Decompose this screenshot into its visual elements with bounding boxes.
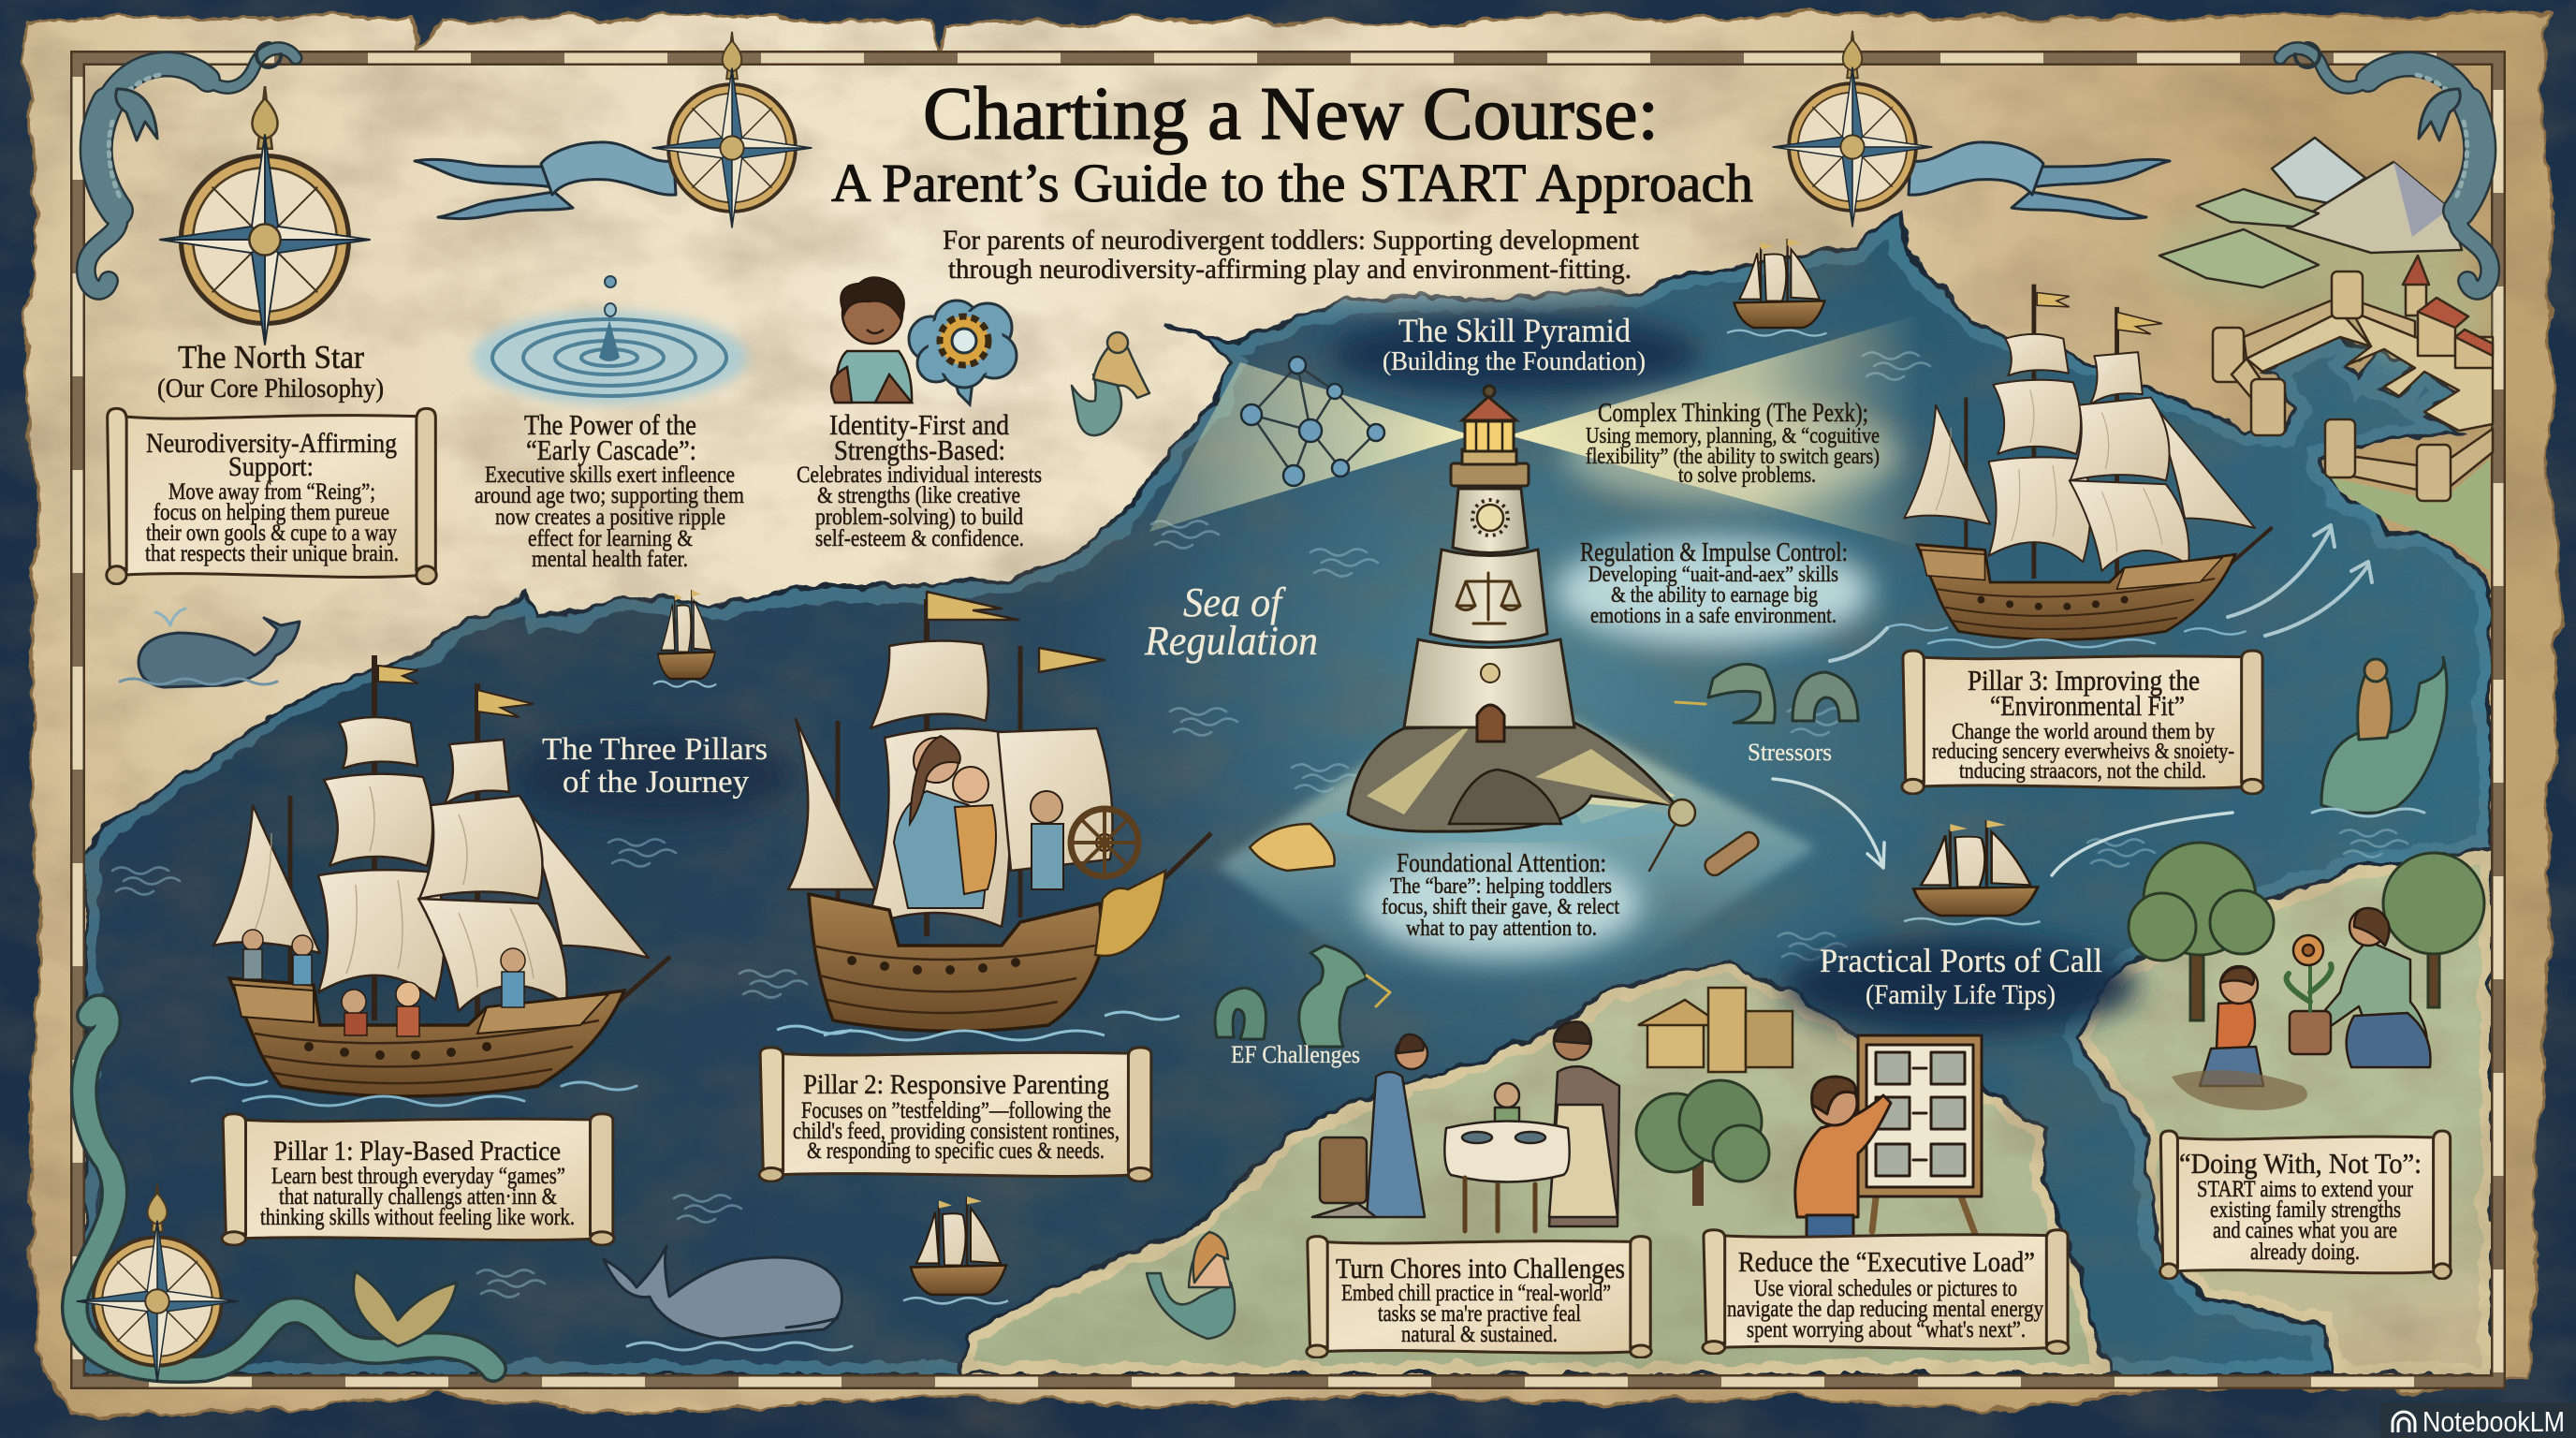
heading: the skill pyramid: (Building the Foundation): [1383, 346, 1646, 376]
heading: the three pillars of the journey: [542, 732, 768, 800]
heading: the north star: The North Star: [178, 339, 364, 375]
scroll: doing with, not to: START aims to extend your: [2197, 1177, 2414, 1202]
family at the table: [1312, 1021, 1619, 1231]
icon: brain and gear: [909, 301, 1017, 404]
scroll: reduce the executive load: Reduce the “Executive Load”: [1738, 1245, 2035, 1278]
scroll: reduce the executive load: navigate the dap reducing mental energy: [1727, 1297, 2043, 1322]
heading: the skill pyramid: The Skill Pyramid: [1398, 312, 1631, 349]
small ship, upper coast: [653, 590, 716, 687]
scroll: reduce the executive load: spent worrying about “what's next”.: [1747, 1317, 2026, 1343]
sea dragon: stressors: [1676, 664, 1858, 723]
lost items: map bag, key and log: [1250, 800, 1762, 879]
light beam wedges from the lighthouse: [1149, 315, 1919, 983]
sun emblem: [1472, 500, 1508, 536]
heading: practical ports of call: (Family Life Tips): [1866, 979, 2056, 1010]
whale, bottom: [604, 1246, 852, 1350]
foundational attention text: [1382, 849, 1619, 941]
rock island: [1315, 721, 1680, 843]
foundational attention text: focus, shift their gave, & relect: [1382, 895, 1619, 919]
text: the power of the early cascade: Executive skills exert infleence: [485, 462, 735, 488]
text: complex thinking: Complex Thinking (The Pexk);: [1598, 399, 1868, 428]
text: the power of the early cascade: now creates a positive ripple: [495, 505, 725, 530]
foundational attention text: what to pay attention to.: [1406, 917, 1597, 941]
compass: bottom left: [77, 1184, 238, 1382]
ship: pillar 1: [192, 655, 670, 1106]
scroll: pillar 3 environmental fit: Pillar 3: Improving the: [1968, 664, 2200, 697]
scroll: reduce the executive load: Use vioral schedules or pictures to: [1754, 1276, 2017, 1301]
text: complex thinking: to solve problems.: [1678, 463, 1816, 488]
scroll: pillar 3 environmental fit: reducing sencery everwheivs & snoiety-: [1932, 740, 2234, 764]
heading: practical ports of call: [1820, 942, 2102, 1010]
mountains and green hills, top right: [2153, 138, 2490, 356]
text: the power of the early cascade: effect for learning &: [528, 526, 693, 551]
scroll: turn chores into challenges: [1307, 1237, 1651, 1357]
heading: the north star: (Our Core Philosophy): [157, 374, 384, 404]
scroll: turn chores into challenges: natural & sustained.: [1401, 1322, 1558, 1347]
text: identity-first and strengths-based: self-esteem & confidence.: [815, 526, 1024, 551]
curved arrows toward the harbour: [1830, 525, 2372, 661]
heading: the skill pyramid: [1383, 312, 1646, 376]
scroll: pillar 1 play-based practice: thinking skills without feeling like work.: [260, 1205, 575, 1230]
intro text: [943, 225, 1640, 285]
ribbon banner, right: [1909, 142, 2170, 219]
scroll: turn chores into challenges: tasks se ma're practive feal: [1378, 1301, 1581, 1327]
label: sea of regulation: Regulation: [1144, 618, 1318, 664]
text: the power of the early cascade: “Early Cascade”:: [526, 433, 696, 466]
scroll: pillar 2 responsive parenting: Pillar 2: Responsive Parenting: [803, 1069, 1109, 1100]
scroll: pillar 2 responsive parenting: child's feed, providing consistent rontines,: [793, 1119, 1120, 1144]
sea serpent with compass, bottom left: [75, 1007, 493, 1370]
wave marks scattered across the sea: [112, 352, 2408, 1298]
scroll: pillar 1 play-based practice: that naturally challengs atten·inn &: [279, 1184, 557, 1210]
scroll: turn chores into challenges: Embed chill practice in “real-world”: [1341, 1281, 1611, 1306]
sea and lower land bodies: [84, 211, 2492, 1375]
sea dragon: EF challenges: [1215, 946, 1390, 1047]
intro text: through neurodiversity-affirming play and environment-fitting.: [948, 254, 1632, 285]
small ship, top bay: [1727, 239, 1826, 336]
text: complex thinking: flexibility” (the ability to switch gears): [1586, 445, 1880, 469]
small ship, bottom: [903, 1196, 1008, 1303]
text: identity-first and strengths-based: Strengths-Based:: [834, 433, 1005, 466]
heading: the three pillars of the journey: The Three Pillars: [542, 732, 768, 767]
title: Charting a New Course:: [923, 73, 1659, 155]
text: identity-first and strengths-based: [797, 408, 1042, 551]
scales emblem: [1456, 573, 1520, 624]
text: regulation and impulse control: Regulation & Impulse Control:: [1580, 538, 1848, 567]
mermaid on rock, right: [2312, 657, 2447, 816]
door and beam emblem: [1477, 664, 1504, 741]
icon: child: [831, 277, 912, 403]
scroll: neurodiversity-affirming support: their own gools & cupe to a way: [146, 521, 397, 546]
scroll: pillar 3 environmental fit: [1902, 651, 2263, 794]
scroll: neurodiversity-affirming support: Move away from “Reing”;: [168, 479, 375, 505]
arrow: stressors to small ship: [1773, 779, 1884, 868]
text: identity-first and strengths-based: Identity-First and: [829, 408, 1009, 441]
compass: left of title: [652, 32, 812, 227]
text: regulation and impulse control: [1580, 538, 1848, 628]
scroll: pillar 3 environmental fit: tnducing straacors, not the child.: [1959, 759, 2206, 784]
scroll: doing with, not to: and caines what you are: [2213, 1218, 2397, 1243]
text: the power of the early cascade: [475, 408, 744, 572]
label: EF challenges: EF Challenges: [1231, 1041, 1360, 1068]
foundational attention text: The “bare”: helping toddlers: [1390, 874, 1612, 899]
compass: north star: [159, 86, 371, 345]
mermaid, top: [1072, 332, 1149, 435]
compass: right of title: [1773, 31, 1932, 227]
text: identity-first and strengths-based: problem-solving) to build: [815, 505, 1023, 530]
scroll: neurodiversity-affirming support: [107, 408, 436, 584]
ribbon banner, left: [415, 142, 676, 219]
scroll: neurodiversity-affirming support: focus on helping them pureue: [154, 500, 389, 525]
text: the power of the early cascade: The Power of the: [524, 408, 696, 441]
harbour fortress: [2213, 256, 2493, 571]
text: the power of the early cascade: mental health fater.: [532, 547, 688, 572]
text glows behind sea labels: [515, 244, 2139, 1033]
scroll: doing with, not to: [2160, 1131, 2451, 1279]
scroll: pillar 1 play-based practice: Learn best through everyday “games”: [271, 1164, 565, 1189]
tower tiers: [1404, 386, 1574, 727]
gardening parent and child: [2172, 908, 2430, 1110]
heading: practical ports of call: Practical Ports of Call: [1820, 942, 2102, 979]
lighthouse: [1315, 386, 1680, 843]
scroll: neurodiversity-affirming support: Neurodiversity-Affirming: [146, 428, 397, 459]
icon: water ripple: [472, 276, 747, 404]
text: identity-first and strengths-based: & strengths (like creative: [817, 483, 1020, 508]
intro text: For parents of neurodivergent toddlers: Supporting development: [943, 225, 1640, 256]
foundational attention text: Foundational Attention:: [1397, 849, 1606, 878]
small whale, top left: [120, 609, 300, 687]
scroll: neurodiversity-affirming support: that respects their unique brain.: [145, 541, 399, 566]
text: regulation and impulse control: Developing “uait-and-aex” skills: [1588, 563, 1838, 587]
corner dragon, top right: [2280, 43, 2490, 290]
village on the island: [1638, 988, 1793, 1072]
small ship, centre right: [1904, 820, 2041, 924]
network icon: [1241, 357, 1384, 486]
scroll: neurodiversity-affirming support: Support:: [228, 451, 314, 482]
scroll: doing with, not to: already doing.: [2250, 1240, 2360, 1265]
heading: the three pillars of the journey: of the Journey: [563, 765, 749, 800]
text: complex thinking: [1586, 399, 1880, 488]
title: A Parent’s Guide to the START Approach: [831, 153, 1753, 213]
scroll: pillar 2 responsive parenting: & responding to specific cues & needs.: [807, 1138, 1105, 1164]
tree cluster: [1636, 1080, 1769, 1206]
schedule board and child: [1795, 1035, 1982, 1238]
scroll: pillar 1 play-based practice: Pillar 1: Play-Based Practice: [273, 1136, 561, 1167]
text: identity-first and strengths-based: Celebrates individual interests: [797, 462, 1042, 488]
text: the power of the early cascade: around age two; supporting them: [475, 483, 744, 508]
text: regulation and impulse control: emotions in a safe environment.: [1590, 604, 1837, 628]
label: sea of regulation: [1144, 580, 1318, 664]
scroll: doing with, not to: existing family strengths: [2210, 1197, 2401, 1223]
heading: the north star: [157, 339, 384, 404]
ship: pillar 2 with parent and child: [777, 592, 1211, 1040]
scroll: pillar 3 environmental fit: “Environmental Fit”: [1990, 689, 2185, 722]
label: stressors: Stressors: [1748, 739, 1832, 766]
curve: ship to shore: [2052, 813, 2232, 875]
text: complex thinking: Using memory, planning, & “coguitive: [1586, 424, 1880, 448]
trees, right shore: [2129, 843, 2484, 1020]
scroll: pillar 2 responsive parenting: Focuses on ”testfelding”—following the: [801, 1098, 1111, 1123]
scroll: reduce the executive load: [1703, 1230, 2069, 1354]
scroll: pillar 3 environmental fit: Change the world around them by: [1952, 720, 2215, 744]
title: [831, 73, 1753, 213]
text: regulation and impulse control: & the ability to earnage big: [1611, 583, 1818, 608]
scroll: pillar 2 responsive parenting: [759, 1048, 1152, 1181]
corner dragon, top left: [86, 43, 296, 290]
scroll: turn chores into challenges: Turn Chores into Challenges: [1336, 1252, 1625, 1284]
ship: pillar 3: [1887, 285, 2273, 647]
scroll: pillar 1 play-based practice: [222, 1114, 614, 1245]
scroll: doing with, not to: “Doing With, Not To”:: [2179, 1147, 2422, 1180]
mermaid, bottom: [1147, 1232, 1235, 1339]
label: sea of regulation: Sea of: [1183, 580, 1287, 625]
